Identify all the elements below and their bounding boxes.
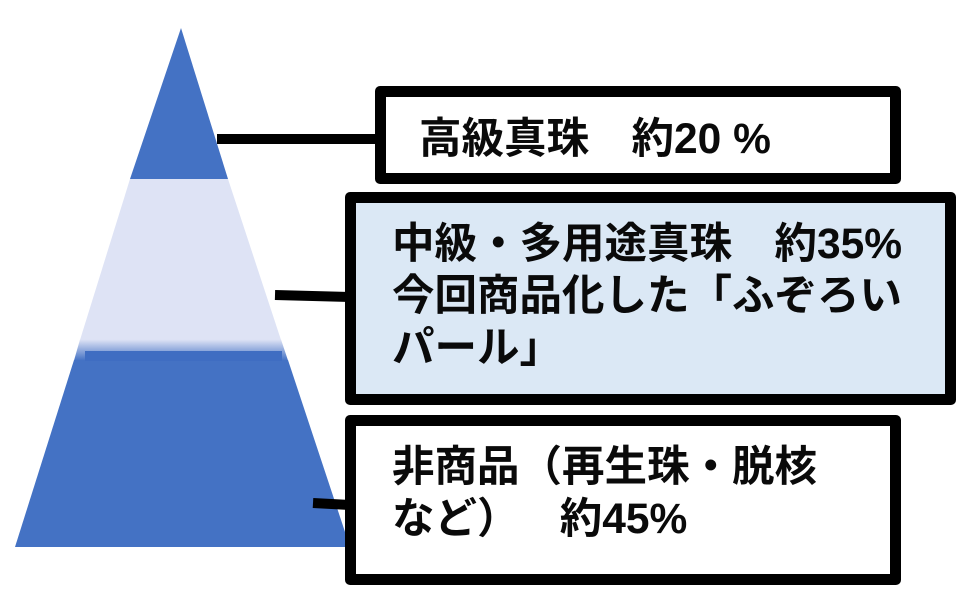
panel: mid-grade pearls — [345, 192, 956, 405]
connector: top tier — [217, 134, 378, 144]
panel: non-commercial — [345, 415, 901, 585]
connector: middle tier — [275, 295, 350, 297]
panel: high-grade pearls — [375, 86, 901, 184]
pyramid tier: middle — [80, 179, 281, 340]
pyramid tier: top — [130, 28, 228, 179]
pyramid tier: bottom — [15, 360, 350, 547]
label: mid-grade: 中級・多用途真珠 約35% 今回商品化した「ふぞろい パール」 — [392, 221, 902, 372]
pyramid tier: darker inner band — [85, 351, 282, 361]
label: high-grade: 高級真珠 約20 % — [419, 116, 771, 163]
connector: bottom tier — [313, 503, 350, 505]
pyramid tier: transition band — [74, 340, 288, 360]
label: non-commercial: 非商品（再生珠・脱核 など） 約45% — [392, 444, 817, 543]
